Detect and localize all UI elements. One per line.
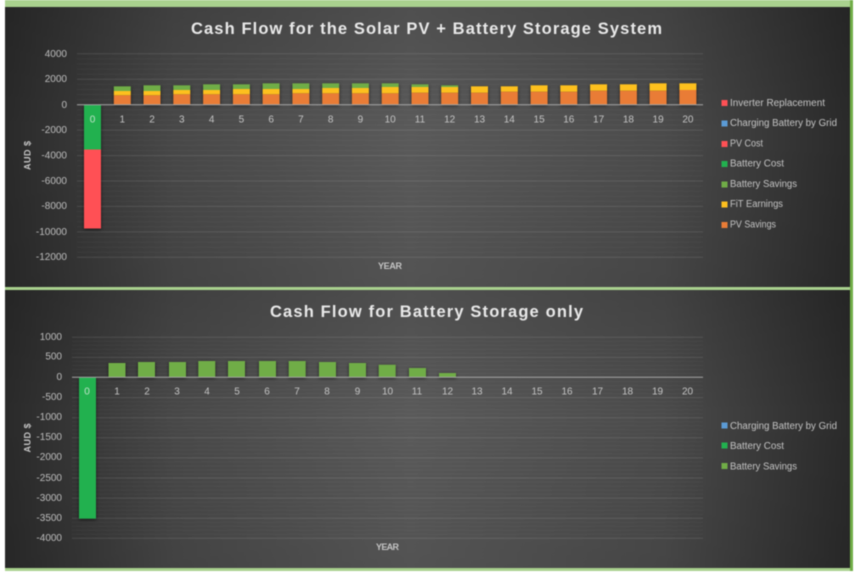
- bar: year 0 costs: [84, 105, 101, 228]
- panel: solar PV + battery cash flow: [5, 7, 850, 287]
- x axis labels: 3: [179, 114, 185, 126]
- y axis labels: [36, 332, 62, 544]
- x axis labels: 17: [592, 386, 603, 398]
- legend: Battery Cost: [730, 441, 784, 452]
- x axis labels: 20: [682, 114, 694, 126]
- y axis labels: -4000: [41, 150, 67, 162]
- x axis labels: 19: [652, 386, 663, 398]
- x axis labels: 16: [563, 114, 575, 126]
- y axis title: AUD $: [22, 424, 32, 452]
- x axis labels: 2: [149, 114, 155, 126]
- x axis labels: 12: [444, 114, 456, 126]
- x axis labels: 17: [593, 114, 605, 126]
- y axis labels: -6000: [41, 176, 67, 187]
- x axis labels: 16: [561, 386, 573, 398]
- x axis labels: 0: [84, 386, 90, 398]
- legend: Charging Battery by Grid: [730, 421, 837, 432]
- y axis labels: -500: [42, 392, 62, 403]
- x axis labels: 4: [204, 386, 210, 398]
- legend: Battery Savings: [730, 179, 797, 190]
- x axis labels: 13: [474, 114, 485, 126]
- x axis labels: 19: [653, 114, 664, 126]
- y axis labels: -1000: [36, 412, 62, 423]
- x axis labels: 18: [623, 114, 634, 126]
- x axis labels: 18: [622, 386, 633, 398]
- x axis labels: 8: [328, 114, 334, 126]
- legend: [722, 98, 837, 230]
- y axis labels: -2000: [36, 452, 62, 463]
- x axis title: YEAR: [378, 261, 402, 271]
- x axis labels: 15: [534, 114, 545, 126]
- x axis labels: 14: [504, 114, 515, 126]
- x axis labels: 12: [442, 386, 453, 398]
- panel: battery storage only cash flow: [5, 290, 850, 568]
- x axis labels: [84, 386, 693, 398]
- x axis labels: 1: [114, 386, 120, 398]
- x axis title: YEAR: [376, 542, 400, 552]
- legend: Charging Battery by Grid: [730, 118, 837, 129]
- bars: [79, 361, 456, 519]
- y axis labels: -4000: [36, 533, 62, 544]
- y axis labels: -8000: [41, 201, 67, 212]
- x axis labels: 14: [501, 386, 513, 398]
- x axis labels: 13: [471, 386, 483, 398]
- legend: FiT Earnings: [730, 199, 783, 210]
- x axis labels: 11: [412, 386, 423, 398]
- x axis labels: 20: [682, 386, 693, 398]
- legend: Battery Cost: [730, 158, 784, 170]
- y axis labels: 4000: [45, 49, 67, 60]
- y axis labels: 1000: [40, 332, 62, 343]
- x axis labels: 10: [385, 114, 396, 126]
- x axis labels: 8: [324, 386, 330, 398]
- title: solar PV + battery: Cash Flow for the Solar PV + Battery Storage System: [191, 20, 662, 38]
- x axis labels: 6: [268, 114, 274, 126]
- x axis labels: 6: [264, 386, 270, 398]
- legend: Inverter Replacement: [730, 98, 825, 109]
- y axis labels: 0: [61, 100, 67, 111]
- x axis labels: 11: [415, 114, 426, 126]
- x axis labels: 9: [355, 386, 361, 398]
- y axis labels: -1500: [36, 432, 62, 443]
- legend: Battery Savings: [730, 462, 797, 472]
- x axis labels: 15: [531, 386, 543, 398]
- x axis labels: 7: [298, 114, 304, 126]
- y axis labels: -10000: [36, 227, 67, 238]
- x axis labels: [90, 114, 694, 126]
- x axis labels: 9: [358, 114, 364, 126]
- x axis labels: 3: [174, 386, 180, 398]
- title: battery storage only: Cash Flow for Battery Storage only: [270, 303, 584, 321]
- y axis labels: -2500: [36, 473, 62, 484]
- x axis labels: 7: [294, 386, 300, 398]
- legend: [722, 421, 837, 472]
- y axis labels: 2000: [45, 74, 67, 85]
- y axis labels: -2000: [41, 125, 67, 136]
- y axis title: AUD $: [22, 141, 32, 170]
- x axis labels: 5: [234, 386, 240, 398]
- stacked bars: [84, 83, 696, 228]
- x axis labels: 4: [209, 114, 215, 126]
- legend: PV Cost: [730, 138, 763, 150]
- y axis labels: 0: [56, 372, 62, 383]
- y axis labels: 500: [45, 352, 62, 362]
- x axis labels: 10: [382, 386, 393, 398]
- x axis labels: 1: [120, 114, 126, 126]
- x axis labels: 0: [90, 114, 96, 126]
- legend: PV Savings: [730, 220, 776, 230]
- x axis labels: 5: [239, 114, 245, 126]
- y axis labels: [36, 49, 67, 263]
- x axis labels: 2: [144, 386, 150, 398]
- y axis labels: -3500: [36, 513, 62, 524]
- y axis labels: -12000: [36, 252, 67, 263]
- y axis labels: -3000: [36, 493, 62, 504]
- bar: battery cost year 0: [79, 377, 96, 519]
